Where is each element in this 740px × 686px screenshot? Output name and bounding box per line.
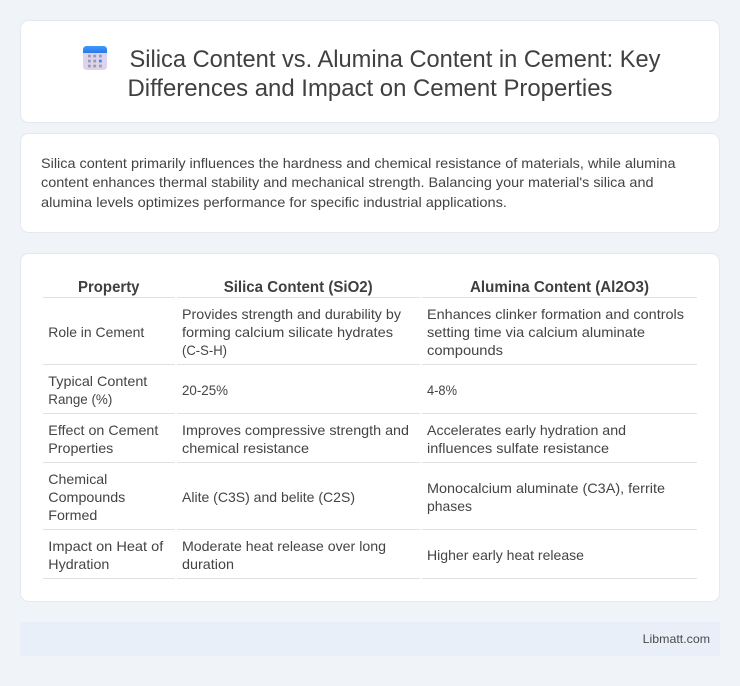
table row: role in cement: forming calcium silicate hydrates	[182, 324, 393, 340]
footer: Libmatt.com	[643, 632, 710, 646]
icon: calendar	[83, 46, 107, 70]
table header row: Property	[78, 279, 140, 296]
summary text: content enhances thermal stability and mechanical strength. Balancing your material's silica and	[41, 174, 654, 190]
table row: effect on cement properties: Accelerates early hydration and	[427, 422, 626, 438]
table header row: Alumina Content (Al2O3)	[470, 279, 649, 296]
table row: impact on heat of hydration: Higher early heat release	[427, 547, 584, 563]
table row: chemical compounds formed: phases	[427, 498, 472, 514]
table row: impact on heat of hydration: Impact on Heat of	[48, 538, 163, 554]
table row: typical content range: 20-25%	[182, 382, 228, 398]
title	[128, 46, 660, 102]
panel: summary card	[20, 134, 720, 232]
table row: role in cement	[43, 306, 697, 365]
table row: chemical compounds formed: Chemical	[48, 471, 107, 487]
table row: role in cement: (C-S-H)	[182, 342, 227, 358]
table row: impact on heat of hydration	[43, 538, 697, 579]
summary text: Silica content primarily influences the hardness and chemical resistance of materials, while alumina	[41, 155, 676, 171]
table row: effect on cement properties: chemical resistance	[182, 440, 309, 456]
table row: chemical compounds formed: Alite (C3S) and belite (C2S)	[182, 489, 355, 505]
table row: role in cement: setting time via calcium aluminate	[427, 324, 645, 340]
table row: typical content range	[43, 373, 697, 414]
table row: effect on cement properties: influences sulfate resistance	[427, 440, 609, 456]
summary text: alumina levels optimizes performance for specific industrial applications.	[41, 194, 507, 210]
table row: impact on heat of hydration: Hydration	[48, 556, 109, 572]
table row: chemical compounds formed	[43, 471, 697, 530]
table row: impact on heat of hydration: Moderate heat release over long	[182, 538, 386, 554]
table row: role in cement: compounds	[427, 342, 503, 358]
table row: chemical compounds formed: Compounds	[48, 489, 125, 505]
table row: role in cement: Provides strength and durability by	[182, 306, 401, 322]
table header row	[43, 279, 697, 298]
table row: typical content range: Range (%)	[48, 391, 112, 407]
table row: effect on cement properties: Properties	[48, 440, 113, 456]
footer	[20, 622, 720, 656]
table row: typical content range: 4-8%	[427, 382, 457, 398]
table row: effect on cement properties: Improves compressive strength and	[182, 422, 409, 438]
table row: chemical compounds formed: Monocalcium aluminate (C3A), ferrite	[427, 480, 665, 496]
title: Differences and Impact on Cement Properties	[128, 75, 612, 102]
table row: role in cement: Enhances clinker formation and controls	[427, 306, 684, 322]
table row: impact on heat of hydration: duration	[182, 556, 234, 572]
table row: typical content range: Typical Content	[48, 373, 147, 389]
table row: chemical compounds formed: Formed	[48, 507, 97, 523]
table row: effect on cement properties: Effect on Cement	[48, 422, 158, 438]
table header row: Silica Content (SiO2)	[224, 279, 373, 296]
panel: comparison table	[20, 254, 720, 602]
summary text	[41, 155, 676, 210]
table row: role in cement: Role in Cement	[48, 324, 144, 340]
table row: effect on cement properties	[43, 422, 697, 463]
title: Silica Content vs. Alumina Content in Cement: Key	[130, 46, 660, 73]
panel: title card	[20, 20, 720, 122]
